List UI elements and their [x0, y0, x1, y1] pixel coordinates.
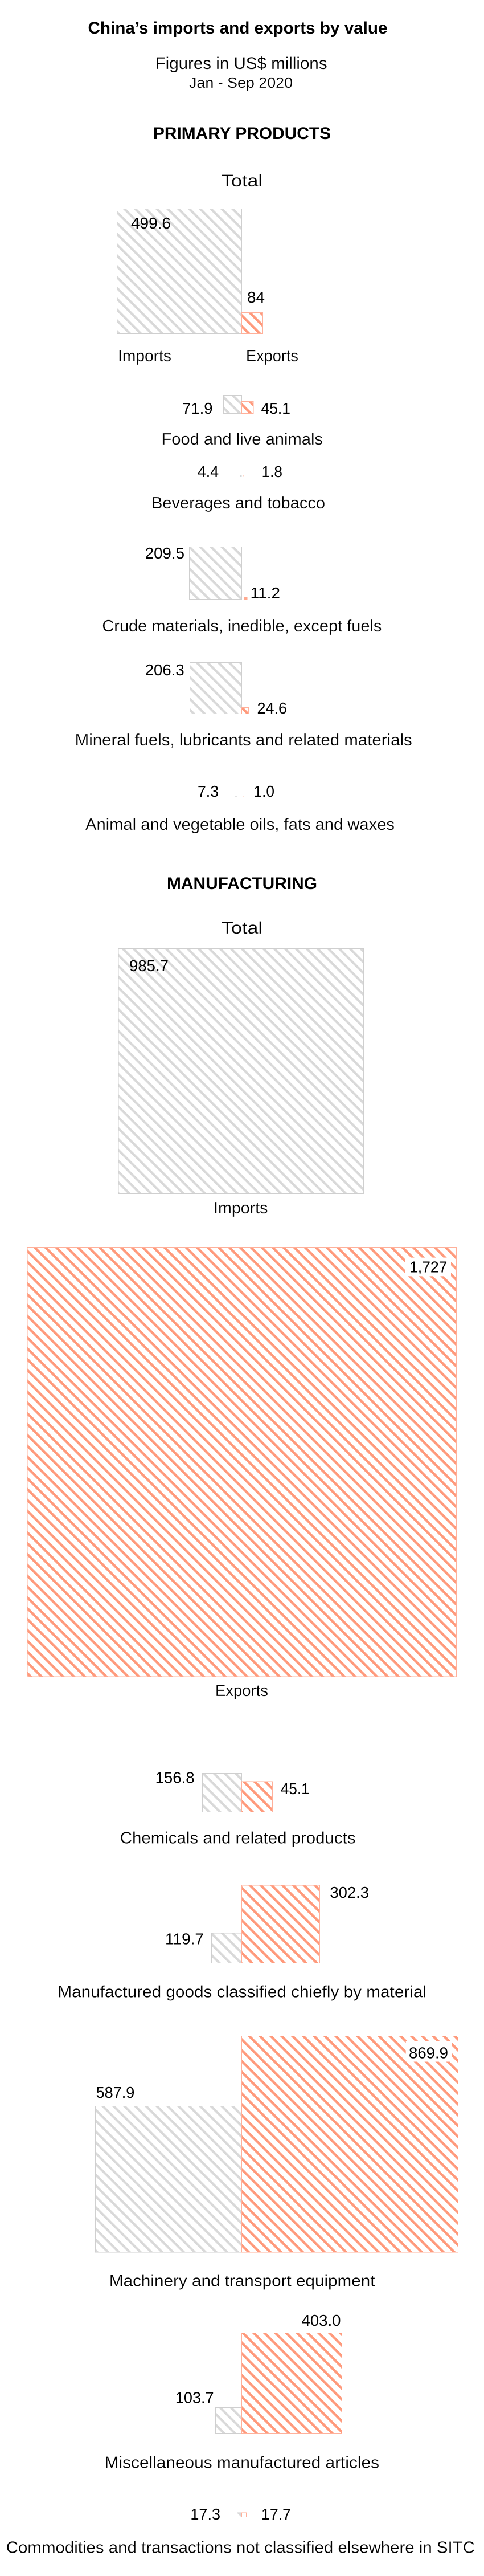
exports square: [241, 2513, 246, 2517]
chart: chemicals: [120, 1769, 355, 1848]
imports label: Imports: [214, 1199, 268, 1217]
exports value: 1,727: [409, 1258, 447, 1276]
value background: [406, 2041, 452, 2062]
imports square: [212, 1933, 241, 1963]
chart: manufacturing total imports: [118, 948, 363, 1217]
imports square: [235, 796, 237, 797]
imports value: 209.5: [145, 544, 184, 562]
heading: primary products: PRIMARY PRODUCTS: [153, 124, 331, 143]
category label: Animal and vegetable oils, fats and waxes: [85, 816, 395, 834]
exports square: [241, 1885, 320, 1963]
chart: machinery and transport equipment: [96, 2036, 458, 2290]
exports label: Exports: [215, 1682, 268, 1700]
category label: Commodities and transactions not classified elsewhere in SITC: [6, 2538, 475, 2557]
exports value: 45.1: [261, 400, 290, 417]
category label: Miscellaneous manufactured articles: [105, 2454, 379, 2472]
exports value: 11.2: [251, 584, 280, 602]
chart: food and live animals: [162, 396, 323, 449]
chart: animal and vegetable oils: [85, 782, 395, 834]
imports label: Imports: [118, 347, 171, 365]
exports value: 869.9: [409, 2044, 448, 2062]
category label: Food and live animals: [162, 430, 323, 449]
imports square: [237, 2513, 241, 2517]
imports value: 206.3: [145, 661, 184, 679]
imports square: [117, 209, 241, 334]
imports value: 985.7: [129, 957, 169, 975]
imports value: 71.9: [182, 400, 213, 417]
exports square: [241, 2333, 342, 2434]
title: China’s imports and exports by value: [88, 19, 387, 38]
chart: miscellaneous manufactured articles: [105, 2312, 379, 2472]
exports square: [243, 475, 244, 476]
imports square: [223, 396, 241, 414]
chart: manufacturing total exports: [27, 1247, 457, 1700]
imports square: [118, 948, 363, 1193]
category label: Mineral fuels, lubricants and related materials: [75, 731, 412, 749]
imports value: 7.3: [198, 782, 219, 800]
exports square: [241, 1782, 272, 1812]
subheading: primary total: Total: [222, 172, 262, 190]
chart: manufactured goods: [58, 1884, 426, 2002]
chart: commodities not classified elsewhere: [6, 2505, 475, 2557]
exports square: [241, 312, 263, 334]
exports value: 1.8: [262, 463, 282, 480]
chart: mineral fuels: [75, 661, 412, 749]
imports square: [190, 662, 241, 714]
imports value: 119.7: [165, 1930, 204, 1948]
category label: Machinery and transport equipment: [109, 2272, 375, 2290]
chart: crude materials: [102, 544, 382, 635]
imports value: 499.6: [131, 214, 171, 232]
imports value: 103.7: [175, 2389, 214, 2407]
imports square: [189, 547, 241, 600]
exports square: [27, 1247, 457, 1677]
imports square: [96, 2106, 241, 2252]
exports value: 1.0: [254, 782, 274, 800]
imports value: 17.3: [190, 2505, 220, 2523]
category label: Beverages and tobacco: [151, 494, 325, 512]
value background: [405, 1258, 451, 1276]
imports square: [240, 475, 241, 477]
exports square: [241, 401, 253, 414]
exports square: [241, 2036, 458, 2252]
imports square: [203, 1774, 241, 1812]
imports value: 156.8: [155, 1769, 195, 1786]
category label: Chemicals and related products: [120, 1829, 355, 1848]
exports value: 302.3: [330, 1884, 369, 1901]
exports value: 84: [247, 288, 265, 306]
exports square: [243, 796, 244, 797]
exports value: 24.6: [257, 699, 287, 717]
subheading: manufacturing total: Total: [222, 919, 262, 938]
subtitle: units: Figures in US$ millions: [155, 54, 327, 73]
exports value: 403.0: [302, 2312, 341, 2329]
category label: Crude materials, inedible, except fuels: [102, 617, 382, 635]
exports square: [241, 708, 248, 714]
exports square: [244, 597, 247, 600]
imports value: 4.4: [198, 463, 219, 480]
exports label: Exports: [246, 347, 298, 365]
heading: manufacturing: MANUFACTURING: [167, 874, 317, 893]
imports square: [215, 2407, 241, 2434]
chart: primary products total: [117, 209, 298, 365]
exports value: 17.7: [261, 2505, 291, 2523]
subtitle: period: Jan - Sep 2020: [189, 74, 293, 91]
imports value: 587.9: [96, 2084, 134, 2101]
category label: Manufactured goods classified chiefly by material: [58, 1983, 426, 2002]
chart: beverages and tobacco: [151, 463, 325, 512]
exports value: 45.1: [281, 1780, 310, 1798]
